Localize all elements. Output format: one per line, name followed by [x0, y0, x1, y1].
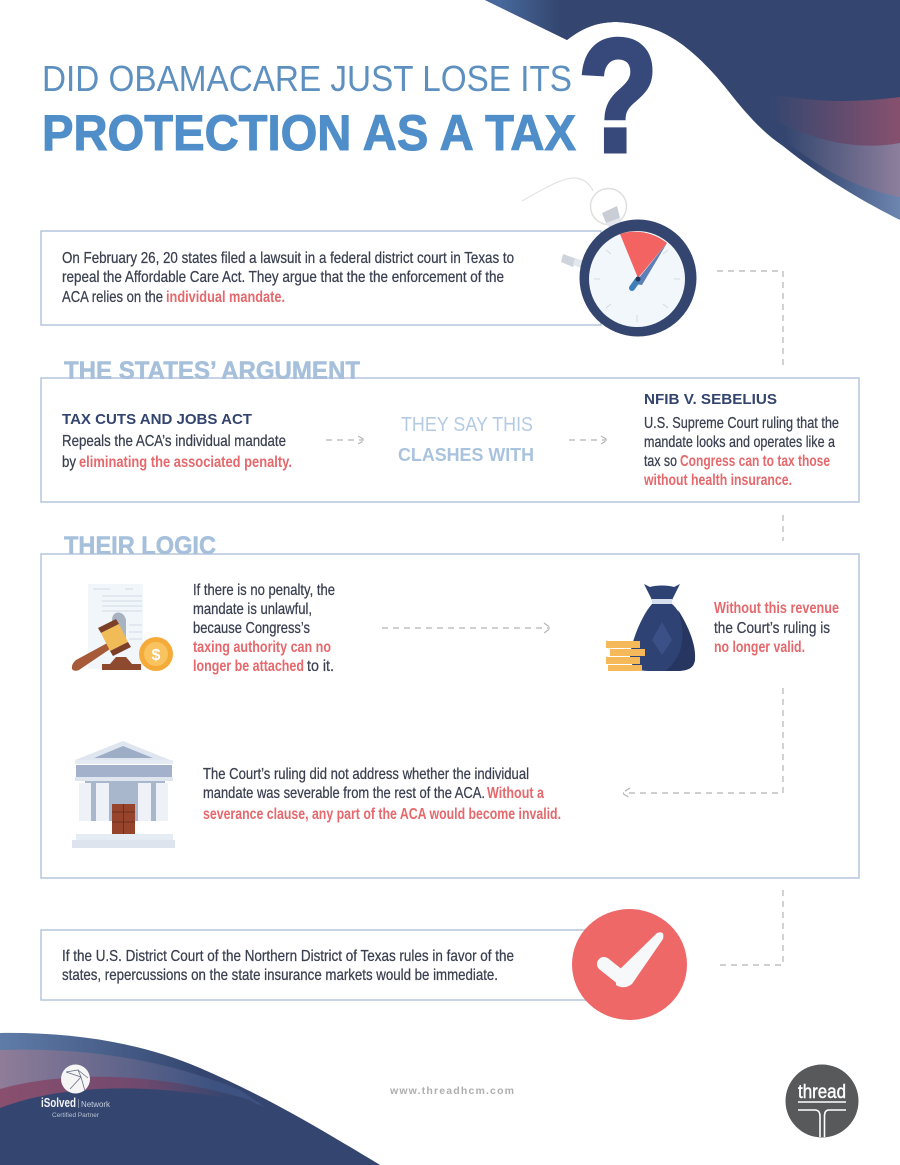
- text: tax cuts and jobs act: Repeals the ACA’s individual mandate: [62, 433, 286, 450]
- text: court's ruling: The Court’s ruling did not address whether the individual: [203, 766, 529, 783]
- title: PROTECTION AS A TAX: [42, 105, 576, 161]
- text: tax cuts and jobs act: by: [62, 454, 76, 471]
- panel: intro: ACA relies on the: [62, 289, 163, 306]
- text: court's ruling: severance clause, any part of the ACA would become invalid.: [203, 806, 561, 823]
- panel: conclusion: [41, 930, 601, 1000]
- title: DID OBAMACARE JUST LOSE ITS: [42, 58, 572, 99]
- arrow: logic dashed: [382, 623, 551, 633]
- text: NFIB v. Sebelius: Congress can to tax those: [680, 453, 830, 470]
- connector: stopwatch to states' argument: [717, 271, 783, 365]
- bottom left wave decoration: [0, 1030, 400, 1165]
- panel: their logic: [41, 532, 859, 878]
- logo: thread: thread: [798, 1082, 846, 1103]
- text: without this revenue: Without this revenue: [714, 600, 839, 617]
- logo: iSolved network: Network: [81, 1100, 111, 1109]
- panel: conclusion: states, repercussions on the state insurance markets would be immediate.: [62, 967, 498, 984]
- heading: their logic: THEIR LOGIC: [64, 532, 216, 560]
- text: tax cuts and jobs act: [62, 411, 292, 471]
- text: they say this clashes with: CLASHES WITH: [398, 445, 534, 465]
- connector: argument to logic: [782, 515, 784, 541]
- icon: courthouse: [72, 741, 175, 848]
- icon: check mark: [572, 909, 687, 1020]
- text: court's ruling: [203, 766, 561, 823]
- text: no penalty: [193, 582, 335, 675]
- text: tax cuts and jobs act: eliminating the associated penalty.: [79, 454, 292, 471]
- website url: www.threadhcm.com: [389, 1085, 514, 1097]
- icon: stopwatch: [522, 178, 696, 336]
- text: NFIB v. Sebelius: without health insurance.: [643, 472, 792, 489]
- text: without this revenue: the Court’s ruling is: [714, 620, 830, 637]
- text: no penalty: to it.: [307, 658, 334, 675]
- text: NFIB v. Sebelius: U.S. Supreme Court ruling that the: [644, 415, 839, 432]
- text: no penalty: because Congress’s: [193, 620, 310, 637]
- title: [42, 58, 576, 161]
- panel: intro: repeal the Affordable Care Act. They argue that the the enforcement of the: [62, 269, 504, 286]
- arrow: revenue to court's ruling: [622, 688, 783, 798]
- arrow: left dashed: [326, 436, 365, 444]
- logo: iSolved network: iSolved: [41, 1095, 76, 1110]
- text: NFIB v. Sebelius: mandate looks and operates like a: [644, 434, 835, 451]
- icon: question mark: ?: [578, 6, 658, 185]
- text: no penalty: mandate is unlawful,: [193, 601, 312, 618]
- panel: the states' argument: [41, 357, 859, 502]
- panel: conclusion: If the U.S. District Court of the Northern District of Texas rules in favor of the: [62, 948, 514, 965]
- text: without this revenue: no longer valid.: [714, 639, 805, 656]
- top right wave decoration: [480, 0, 900, 225]
- panel: intro: On February 26, 20 states filed a lawsuit in a federal district court in Texas to: [62, 250, 514, 267]
- panel: intro: individual mandate.: [166, 289, 285, 306]
- connector: logic to conclusion: [720, 890, 783, 965]
- text: they say this clashes with: [398, 414, 534, 465]
- text: they say this clashes with: THEY SAY THIS: [401, 414, 533, 436]
- text: no penalty: If there is no penalty, the: [193, 582, 335, 599]
- text: NFIB v. Sebelius: NFIB V. SEBELIUS: [644, 391, 777, 408]
- text: no penalty: longer be attached: [193, 658, 304, 675]
- heading: the states' argument: THE STATES’ ARGUMENT: [64, 357, 360, 385]
- text: NFIB v. Sebelius: tax so: [644, 453, 677, 470]
- text: court's ruling: Without a: [487, 785, 544, 802]
- icon: gavel and coin: [72, 584, 173, 671]
- icon: gavel and coin: $: [152, 647, 161, 664]
- logo: thread: [786, 1064, 858, 1138]
- text: tax cuts and jobs act: TAX CUTS AND JOBS ACT: [62, 411, 252, 428]
- logo: iSolved network: Certified Partner: [52, 1112, 100, 1119]
- icon: money bag: [606, 584, 695, 671]
- arrow: right dashed: [569, 436, 608, 444]
- panel: intro: [41, 231, 601, 325]
- text: without this revenue: [714, 600, 839, 656]
- text: NFIB v. Sebelius: [643, 391, 839, 489]
- text: no penalty: taxing authority can no: [193, 639, 331, 656]
- logo: iSolved network: [41, 1064, 111, 1119]
- text: court's ruling: mandate was severable from the rest of the ACA.: [203, 785, 485, 802]
